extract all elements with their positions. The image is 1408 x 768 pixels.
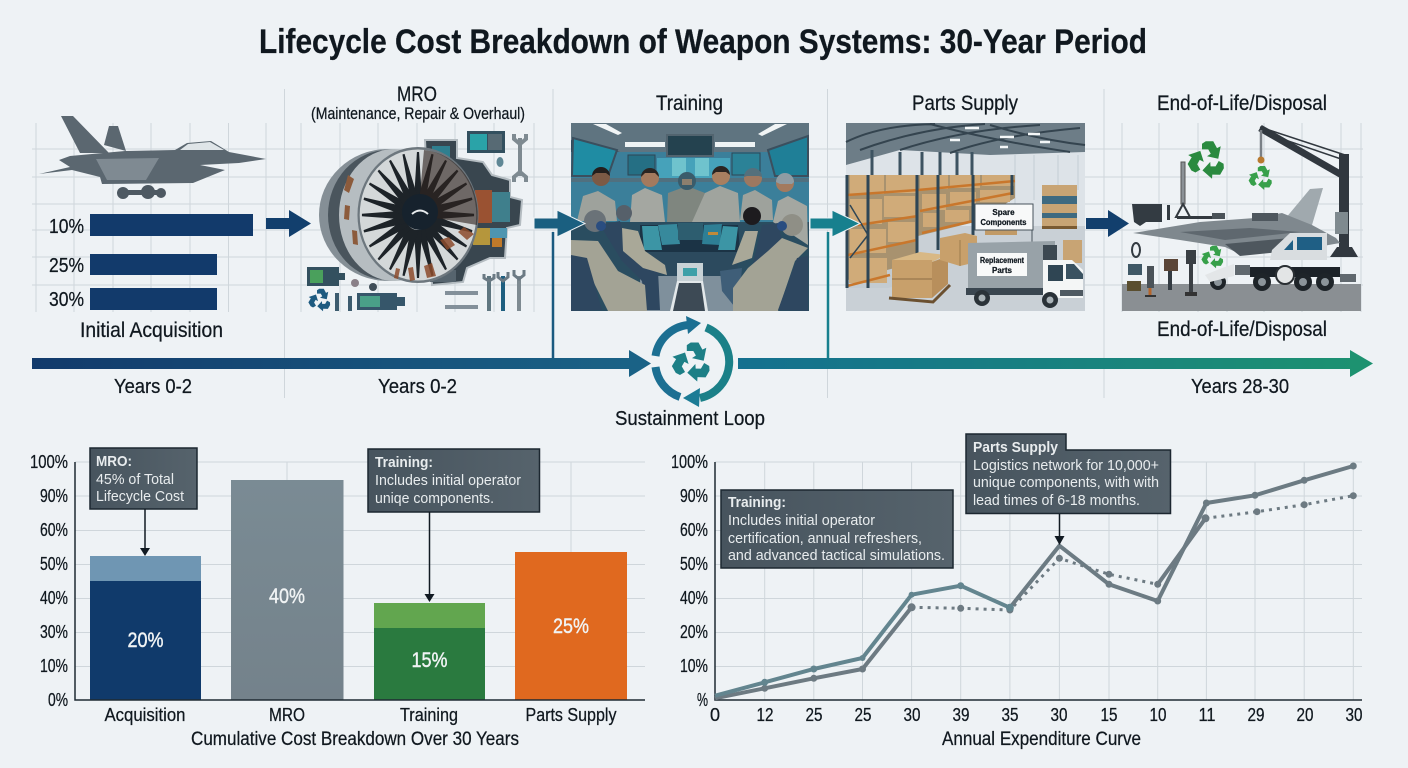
- callout: training detail: Includes initial operator: [728, 512, 875, 529]
- illustration: delivery truck: [966, 241, 1083, 308]
- icon: recycle hook: [1246, 166, 1273, 192]
- y axis labels: 50%: [680, 554, 708, 574]
- illustration: flatbed truck: [1205, 233, 1356, 291]
- subheading: maintenance repair overhaul: (Maintenance, Repair & Overhaul): [311, 104, 525, 123]
- background grid lines: [32, 89, 1363, 398]
- y axis labels: 90%: [40, 486, 68, 506]
- bar: MRO: [231, 480, 344, 700]
- illustration: crane: [1258, 127, 1358, 257]
- callout: training: [368, 449, 540, 602]
- illustration: warehouse: [846, 123, 1085, 311]
- y axis labels: 10%: [680, 656, 708, 676]
- chart: annual expenditure curve: [671, 434, 1362, 750]
- timeline label: years 28-30: Years 28-30: [1191, 376, 1289, 398]
- x axis labels: [710, 705, 1362, 725]
- label: initial acquisition: Initial Acquisition: [80, 319, 223, 342]
- y axis labels: 60%: [40, 520, 68, 540]
- x axis labels: 30: [904, 705, 920, 725]
- sign: spare components: Components: [980, 218, 1027, 227]
- bar: 10%: 10%: [49, 216, 84, 238]
- y axis labels: 20%: [680, 622, 708, 642]
- category labels: [104, 705, 616, 725]
- y axis labels: 40%: [40, 588, 68, 608]
- callout: MRO share: [90, 448, 197, 556]
- panel: parts supply: [846, 92, 1085, 311]
- timeline arrow: right segment: [738, 350, 1373, 377]
- icon: diagnostic monitor: [467, 131, 505, 153]
- icon: sustainment loop: [656, 316, 729, 407]
- x axis labels: 0: [710, 705, 720, 725]
- timeline arrow: left segment: [32, 350, 651, 377]
- category labels: Parts Supply: [526, 705, 616, 725]
- bar: 30%: 30%: [49, 289, 84, 311]
- callout: parts supply detail: lead times of 6-18 months.: [973, 492, 1140, 509]
- y axis labels: [30, 452, 68, 710]
- y axis labels: 60%: [680, 520, 708, 540]
- heading: training: Training: [656, 92, 723, 115]
- callout: parts supply detail: [966, 434, 1170, 545]
- heading: end of life top: End-of-Life/Disposal: [1157, 92, 1327, 115]
- connector: training to timeline: [552, 232, 554, 358]
- sign: spare components: Spare: [992, 208, 1015, 217]
- line: lower solid: [715, 514, 1210, 698]
- callout: parts supply detail: Parts Supply: [973, 439, 1059, 456]
- y axis labels: 0%: [48, 690, 68, 710]
- connector: parts supply to timeline: [827, 232, 829, 358]
- y axis labels: 100%: [671, 452, 708, 472]
- callout: training: Includes initial operator: [375, 472, 521, 489]
- bar: acquisition: 20%: [128, 629, 164, 652]
- icon: fighter jet silhouette: [39, 116, 266, 199]
- line: planned expenditure dotted: [912, 492, 1357, 614]
- x axis labels: 11: [1198, 705, 1216, 725]
- illustration: jet engine: [319, 140, 522, 285]
- panel: initial acquisition: [39, 116, 266, 342]
- icon: diagnostic device left: [307, 267, 377, 291]
- callout: MRO share: 45% of Total: [96, 471, 174, 488]
- illustration: disassembled jet: [1133, 188, 1340, 256]
- label: end of life lower: End-of-Life/Disposal: [1157, 318, 1327, 341]
- x axis labels: 12: [756, 705, 774, 725]
- bar: training: 15%: [412, 649, 448, 672]
- x axis labels: 30: [1050, 705, 1068, 725]
- category labels: MRO: [269, 705, 305, 725]
- bar: 10%: [49, 214, 253, 238]
- arrow: training to parts: [810, 210, 860, 237]
- illustration: small hoist: [1176, 162, 1225, 219]
- x axis labels: 30: [1346, 705, 1362, 725]
- category labels: Acquisition: [104, 705, 186, 725]
- x axis labels: 35: [1002, 705, 1018, 725]
- callout: training: Training:: [375, 454, 433, 471]
- y axis labels: 30%: [40, 622, 68, 642]
- y axis labels: 40%: [680, 588, 708, 608]
- bar: parts supply: 25%: [553, 615, 589, 638]
- timeline label: years 0-2 first: Years 0-2: [114, 376, 192, 398]
- callout: training detail: certification, annual refreshers,: [728, 530, 922, 547]
- arrow: acquisition to MRO: [266, 210, 311, 237]
- bar: acquisition: [90, 556, 201, 700]
- callout: training detail: Training:: [728, 494, 786, 511]
- illustration: delivery truck: Replacement: [980, 256, 1024, 265]
- category labels: Training: [400, 705, 458, 725]
- chart: cumulative cost breakdown: [30, 448, 645, 750]
- chart title: Cumulative Cost Breakdown Over 30 Years: [191, 729, 519, 750]
- icon: recycle large: [1184, 141, 1226, 181]
- icon: recycle small: [306, 289, 331, 313]
- icon: wrenches lower right: [445, 270, 524, 311]
- bar: MRO: 40%: [269, 585, 305, 608]
- y axis labels: 100%: [30, 452, 68, 472]
- icon: diagnostic device right: [357, 293, 405, 310]
- sign: spare components: [975, 204, 1033, 242]
- chart title: Annual Expenditure Curve: [942, 729, 1141, 750]
- callout: MRO share: Lifecycle Cost: [96, 488, 185, 505]
- y axis labels: 90%: [680, 486, 708, 506]
- bar: training: [374, 603, 485, 700]
- y axis labels: 10%: [40, 656, 68, 676]
- callout: training detail: [721, 490, 953, 568]
- callout: MRO share: MRO:: [96, 453, 132, 470]
- arrow: parts to end of life: [1086, 210, 1129, 237]
- x axis labels: 25: [854, 705, 872, 725]
- line: upper solid: [715, 462, 1357, 696]
- callout: parts supply detail: Logistics network for 10,000+: [973, 457, 1159, 474]
- y axis labels: 50%: [40, 554, 68, 574]
- callout: training: uniqe components.: [375, 490, 494, 507]
- panel: MRO: [306, 83, 526, 313]
- icon: recycle small lower: [1199, 246, 1224, 270]
- callout: training detail: and advanced tactical simulations.: [728, 547, 945, 564]
- title: Lifecycle Cost Breakdown of Weapon Systems: 30-Year Period: [259, 23, 1147, 61]
- icons: salvage parts: [1127, 204, 1197, 297]
- bar: 25%: 25%: [49, 255, 84, 277]
- illustration: training simulator: [571, 123, 809, 311]
- panel: training: [571, 92, 809, 311]
- bar: 30%: [49, 288, 217, 311]
- y axis labels: %: [697, 690, 708, 710]
- bar: parts supply: [515, 552, 627, 700]
- callout: parts supply detail: unique components, with with: [973, 474, 1159, 491]
- label: sustainment loop: Sustainment Loop: [615, 408, 765, 430]
- bar: 25%: [49, 254, 217, 277]
- icon: tools left: [337, 293, 350, 311]
- icon: gauge: [496, 157, 504, 167]
- timeline label: years 0-2 second: Years 0-2: [378, 376, 457, 398]
- illustration: delivery truck: Parts: [992, 266, 1013, 275]
- x axis labels: 29: [1248, 705, 1264, 725]
- x axis labels: 10: [1150, 705, 1166, 725]
- x axis labels: 20: [1296, 705, 1314, 725]
- arrow: MRO to training: [534, 210, 585, 237]
- x axis labels: 25: [806, 705, 822, 725]
- illustration: ground: [1122, 284, 1361, 311]
- heading: MRO: MRO: [397, 83, 437, 106]
- icon: wrench upper: [514, 134, 526, 182]
- x axis labels: 15: [1100, 705, 1118, 725]
- panel: end of life: [1122, 92, 1361, 341]
- x axis labels: 39: [952, 705, 970, 725]
- heading: parts supply: Parts Supply: [912, 92, 1018, 115]
- y axis labels: [671, 452, 708, 710]
